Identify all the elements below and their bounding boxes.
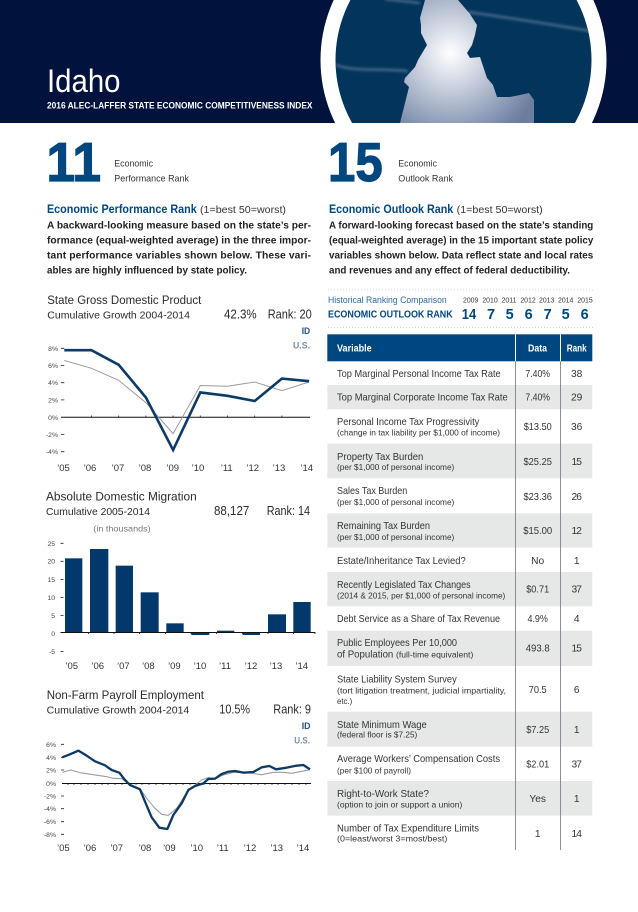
bar chart: migration: 10 xyxy=(47,595,55,602)
line chart: GDP growth: ’07 xyxy=(112,463,124,474)
bar chart: migration: ’07 xyxy=(117,661,130,672)
years: 2009 xyxy=(463,298,479,305)
row: top marginal corporate income tax rate: 29 xyxy=(571,393,583,404)
legend xyxy=(293,326,310,351)
bar chart: migration: ’14 xyxy=(295,661,308,672)
row: state liability system survey: (tort litigation treatment, judicial impartiality, xyxy=(337,685,506,695)
row: personal income tax progressivity: Personal Income Tax Progressivity xyxy=(337,417,480,428)
row: remaining tax burden: 12 xyxy=(571,526,582,537)
row: estate/inheritance tax levied: No xyxy=(531,556,545,567)
line chart: GDP growth: 8% xyxy=(48,346,58,353)
row: estate/inheritance tax levied: Estate/Inheritance Tax Levied? xyxy=(337,556,466,567)
row: average workers compensation costs: (per $100 of payroll) xyxy=(337,765,411,775)
line chart: employment growth: 0% xyxy=(46,781,56,788)
row: sales tax burden xyxy=(337,486,582,507)
line chart: employment growth xyxy=(44,742,311,854)
line chart: GDP growth: ’05 xyxy=(57,463,70,474)
section heading: Economic Outlook Rank xyxy=(329,203,454,216)
row: public employees: Public Employees Per 10,000 xyxy=(337,638,457,649)
row: remaining tax burden xyxy=(337,521,582,542)
historic ranks: 5 xyxy=(506,307,514,323)
legend: ID xyxy=(302,721,311,732)
bar chart: migration: ’09 xyxy=(168,661,181,672)
line chart: GDP growth: 4% xyxy=(48,380,58,387)
row: top marginal personal income tax rate: Top Marginal Personal Income Tax Rate xyxy=(337,369,501,380)
section heading: Economic Performance Rank xyxy=(47,203,197,216)
panel: historical ranking comparison xyxy=(328,290,593,327)
line chart: employment growth: ’09 xyxy=(163,843,176,854)
chart subheading: Cumulative Growth 2004-2014 xyxy=(47,705,190,716)
chart heading: Non-Farm Payroll Employment xyxy=(47,688,205,702)
big rank number 15: 15 xyxy=(328,131,383,193)
historic ranks: 7 xyxy=(544,307,552,323)
row: public employees xyxy=(337,638,582,661)
row: average workers compensation costs xyxy=(337,754,582,775)
bar chart: migration xyxy=(47,541,315,672)
rank label: Economic xyxy=(398,159,437,170)
table header: Rank xyxy=(567,344,587,355)
line chart: employment growth: ’08 xyxy=(139,843,151,854)
bar chart: migration: ’06 xyxy=(91,661,104,672)
bar chart: migration: 25 xyxy=(47,541,55,548)
row: state minimum wage xyxy=(337,720,580,740)
row: number of tax expenditure limits: (0=least/worst 3=most/best) xyxy=(337,834,448,844)
chart subheading: Cumulative 2005-2014 xyxy=(46,507,150,518)
growth value: 10.5% xyxy=(219,701,250,716)
bar chart: migration: 15 xyxy=(47,577,55,584)
row: property tax burden: Property Tax Burden xyxy=(337,452,423,463)
table: policy variables xyxy=(327,334,592,850)
description text: (equal-weighted average) in the 15 important state policy xyxy=(329,235,594,246)
line chart: employment growth: 2% xyxy=(46,768,56,774)
table header: Variable xyxy=(337,344,372,355)
description text: formance (equal-weighted average) in the three impor- xyxy=(47,235,312,246)
row: average workers compensation costs: 37 xyxy=(571,760,582,771)
row: sales tax burden: $23.36 xyxy=(523,492,552,503)
row: number of tax expenditure limits xyxy=(337,824,582,844)
row: public employees: of Population xyxy=(337,650,393,661)
row: state liability system survey: State Liability System Survey xyxy=(337,674,458,685)
line chart: employment growth: ’07 xyxy=(110,843,123,854)
row: state minimum wage: $7.25 xyxy=(526,725,549,736)
row: top marginal personal income tax rate: 7.40% xyxy=(525,369,550,380)
line chart: GDP growth: -2% xyxy=(46,432,58,439)
row: remaining tax burden: (per $1,000 of personal income) xyxy=(337,532,455,542)
comparison label: Historical Ranking Comparison xyxy=(328,295,447,306)
row: property tax burden: $25.25 xyxy=(523,457,552,468)
historic ranks: 6 xyxy=(581,307,589,323)
row: sales tax burden: Sales Tax Burden xyxy=(337,486,407,497)
years: 2015 xyxy=(577,298,593,305)
row: number of tax expenditure limits: 1 xyxy=(535,829,541,840)
row: state minimum wage: State Minimum Wage xyxy=(337,720,427,731)
historic ranks: 14 xyxy=(462,307,476,323)
table header: Data xyxy=(528,344,547,355)
row: state minimum wage: 1 xyxy=(574,725,580,736)
historic ranks: 6 xyxy=(525,307,533,323)
row: personal income tax progressivity: (change in tax liability per $1,000 of income) xyxy=(337,428,500,438)
panel: state gross domestic product xyxy=(46,293,313,474)
description text: A forward-looking forecast based on the state’s standing xyxy=(329,220,593,231)
big rank number 11: 11 xyxy=(46,131,101,193)
chart heading: State Gross Domestic Product xyxy=(47,293,202,307)
row: average workers compensation costs: Average Workers’ Compensation Costs xyxy=(337,754,500,765)
years: 2013 xyxy=(539,298,555,305)
growth value: 42.3% xyxy=(224,306,257,321)
row: estate/inheritance tax levied: 1 xyxy=(574,556,580,567)
description text xyxy=(47,220,312,276)
row: property tax burden: (per $1,000 of personal income) xyxy=(337,462,455,472)
row: number of tax expenditure limits: Number of Tax Expenditure Limits xyxy=(337,824,479,835)
bar chart: migration: ’05 xyxy=(65,661,78,672)
years: 2014 xyxy=(558,298,574,305)
legend: ID xyxy=(302,326,310,337)
row: debt service: 4.9% xyxy=(527,614,548,625)
description text: and revenues and any effect of federal deductibility. xyxy=(329,265,570,276)
row: average workers compensation costs: $2.01 xyxy=(526,760,549,771)
years: 2010 xyxy=(482,298,498,305)
panel: non-farm payroll employment xyxy=(44,688,311,854)
row: right-to-work state xyxy=(337,789,580,810)
row: property tax burden xyxy=(337,452,582,472)
line chart: GDP growth: 2% xyxy=(48,397,58,404)
row: state liability system survey: 6 xyxy=(574,685,580,696)
bar chart: migration: ’08 xyxy=(142,661,155,672)
panel: absolute domestic migration xyxy=(46,489,315,672)
row: number of tax expenditure limits: 14 xyxy=(571,829,582,840)
row: estate/inheritance tax levied xyxy=(337,556,580,567)
row: debt service: 4 xyxy=(574,614,580,625)
bar chart: migration: -5 xyxy=(49,649,55,656)
line chart: GDP growth: ’10 xyxy=(192,463,204,474)
line chart: employment growth: -2% xyxy=(44,794,56,800)
legend xyxy=(294,721,311,746)
line chart: employment growth: -4% xyxy=(44,806,56,813)
row: debt service: Debt Service as a Share of Tax Revenue xyxy=(337,614,500,625)
line chart: GDP growth: ’09 xyxy=(166,463,179,474)
row: public employees: 15 xyxy=(571,644,582,655)
row: recently legislated tax changes: (2014 & 2015, per $1,000 of personal income) xyxy=(337,590,506,600)
icon: Idaho state map in circle xyxy=(320,0,606,123)
historic ranks: 7 xyxy=(487,307,495,323)
bar chart: migration: ’11 xyxy=(219,661,231,672)
line chart: employment growth: ’13 xyxy=(270,843,283,854)
subtitle: 2016 ALEC-LAFFER STATE ECONOMIC COMPETITIVENESS INDEX xyxy=(47,100,313,112)
bar chart: migration: ’12 xyxy=(245,661,257,672)
line chart: employment growth: ’06 xyxy=(84,843,96,854)
historic ranks: 5 xyxy=(562,307,570,323)
rank value: Rank: 9 xyxy=(273,701,311,716)
line chart: employment growth: ’12 xyxy=(244,843,256,854)
historic ranks xyxy=(462,307,589,323)
row: remaining tax burden: Remaining Tax Burden xyxy=(337,521,430,532)
bar chart: migration: ’10 xyxy=(194,661,206,672)
line chart: employment growth: ’11 xyxy=(217,843,229,854)
row: right-to-work state: Right-to-Work State? xyxy=(337,789,429,800)
row: top marginal personal income tax rate: 38 xyxy=(571,369,583,380)
row: top marginal corporate income tax rate: Top Marginal Corporate Income Tax Rate xyxy=(337,393,508,404)
description text: A backward-looking measure based on the state’s per- xyxy=(47,220,312,231)
line chart: GDP growth: ’13 xyxy=(273,463,285,474)
line chart: employment growth: -6% xyxy=(44,819,56,826)
line chart: GDP growth: ’11 xyxy=(221,463,233,474)
bar chart: migration: 5 xyxy=(51,613,55,620)
chart subheading: Cumulative Growth 2004-2014 xyxy=(47,310,190,321)
rank label: Outlook Rank xyxy=(398,174,453,185)
row: personal income tax progressivity: $13.50 xyxy=(524,422,552,433)
header banner xyxy=(0,0,638,123)
line chart: GDP growth: ’14 xyxy=(300,463,313,474)
line chart: GDP growth: 0% xyxy=(48,415,58,422)
row: public employees: 493.8 xyxy=(526,644,550,655)
bar chart: migration: ’13 xyxy=(270,661,282,672)
row: sales tax burden: 26 xyxy=(571,492,582,503)
panel: economic performance rank xyxy=(46,131,312,276)
rank value: Rank: 14 xyxy=(267,503,310,518)
row: state liability system survey xyxy=(337,674,580,706)
chart heading: Absolute Domestic Migration xyxy=(46,489,197,503)
line chart: employment growth: ’10 xyxy=(190,843,203,854)
row: personal income tax progressivity xyxy=(337,417,583,438)
line chart: GDP growth: 6% xyxy=(48,363,58,370)
section heading xyxy=(47,203,286,216)
row: sales tax burden: (per $1,000 of personal income) xyxy=(337,497,455,507)
description text xyxy=(329,220,594,276)
row: recently legislated tax changes xyxy=(337,580,582,600)
rank label xyxy=(398,159,453,185)
row: state minimum wage: (federal floor is $7.25) xyxy=(337,730,418,740)
outlook rank label: ECONOMIC OUTLOOK RANK xyxy=(328,310,453,321)
migration value: 88,127 xyxy=(214,503,249,518)
line chart: GDP growth: ’08 xyxy=(139,463,151,474)
row: top marginal corporate income tax rate: 7.40% xyxy=(525,393,550,404)
years: 2011 xyxy=(502,298,517,305)
years xyxy=(463,298,593,305)
row: recently legislated tax changes: Recently Legislated Tax Changes xyxy=(337,580,471,591)
table header xyxy=(327,334,592,361)
line chart: employment growth: 4% xyxy=(46,755,56,762)
section heading: (1=best 50=worst) xyxy=(457,205,543,216)
line chart: employment growth: -8% xyxy=(44,832,56,839)
row: recently legislated tax changes: $0.71 xyxy=(526,585,549,596)
units note: (in thousands) xyxy=(93,524,151,534)
title: Idaho xyxy=(47,63,120,99)
rank value: Rank: 20 xyxy=(268,306,312,321)
line chart: employment growth: ’14 xyxy=(297,843,309,854)
row: recently legislated tax changes: 37 xyxy=(571,585,582,596)
years: 2012 xyxy=(520,298,536,305)
bar chart: migration: 20 xyxy=(47,558,55,566)
description text: variables shown below. Data reflect state and local rates xyxy=(329,250,594,261)
bar chart: migration: 0 xyxy=(51,631,55,638)
legend: U.S. xyxy=(293,340,310,351)
row: right-to-work state: (option to join or support a union) xyxy=(337,800,463,810)
line chart: GDP growth: -4% xyxy=(46,449,58,456)
line chart: GDP growth: ’06 xyxy=(84,463,96,474)
line chart: employment growth: 6% xyxy=(46,742,56,749)
row: state liability system survey: 70.5 xyxy=(529,685,547,696)
rank label: Performance Rank xyxy=(114,174,189,185)
legend: U.S. xyxy=(294,735,310,746)
line chart: GDP growth xyxy=(46,346,313,474)
row: personal income tax progressivity: 36 xyxy=(571,422,583,433)
description text: ables are highly influenced by state policy. xyxy=(47,265,247,276)
rank label: Economic xyxy=(114,159,153,170)
row: property tax burden: 15 xyxy=(571,457,582,468)
rank label xyxy=(114,159,189,185)
row: right-to-work state: Yes xyxy=(529,794,546,805)
row: right-to-work state: 1 xyxy=(574,794,580,805)
row: remaining tax burden: $15.00 xyxy=(523,526,552,537)
line chart: GDP growth: ’12 xyxy=(246,463,259,474)
line chart: employment growth: ’05 xyxy=(57,843,70,854)
section heading: (1=best 50=worst) xyxy=(200,205,286,216)
section heading xyxy=(329,203,543,216)
description text: tant performance variables shown below. These vari- xyxy=(47,250,312,261)
panel: economic outlook rank xyxy=(328,131,594,276)
row: state liability system survey: etc.) xyxy=(337,696,353,706)
row: public employees: (full-time equivalent) xyxy=(396,650,474,660)
